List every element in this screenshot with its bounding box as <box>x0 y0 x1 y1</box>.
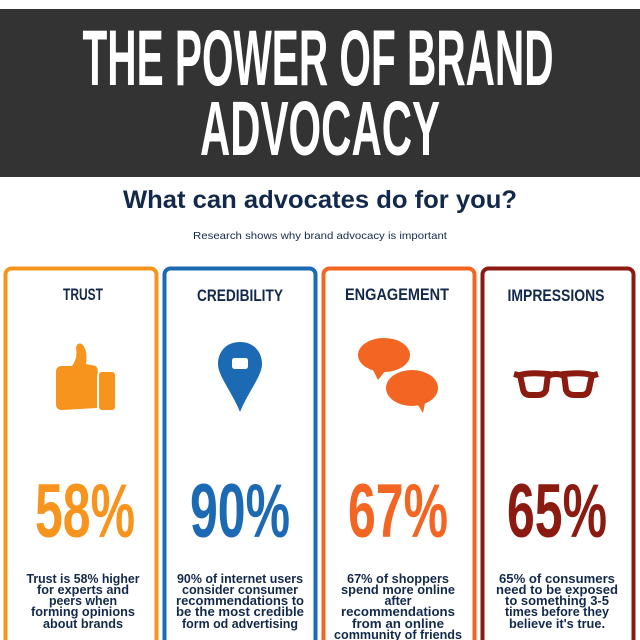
header banner <box>0 9 640 177</box>
panel: trust: Trust is 58% higher <box>26 572 140 586</box>
title: ADVOCACY <box>200 86 440 172</box>
intro text: Research shows why brand advocacy is important <box>193 230 447 242</box>
panel: trust: forming opinions <box>31 605 135 619</box>
panel: engagement: after <box>384 594 412 608</box>
icon: glasses <box>514 373 598 395</box>
icon: map pin <box>218 342 262 412</box>
panel: trust <box>6 268 156 640</box>
panel: engagement: from an online <box>352 617 444 631</box>
title <box>82 13 554 172</box>
panel: impressions: IMPRESSIONS <box>508 286 604 305</box>
panel: trust: for experts and <box>37 583 129 597</box>
panel: credibility: 90% of internet users <box>177 572 303 586</box>
panel: impressions <box>482 268 634 640</box>
panel: credibility: consider consumer <box>182 583 298 597</box>
panel: trust: peers when <box>49 594 117 608</box>
panel: engagement: spend more online <box>341 583 455 597</box>
panel: engagement: 67% <box>348 469 448 554</box>
panel: trust: 58% <box>35 469 135 554</box>
subtitle: What can advocates do for you? <box>123 186 517 214</box>
panel: impressions: times before they <box>505 605 609 619</box>
panel: impressions: believe it's true. <box>509 617 605 631</box>
panel: engagement: 67% of shoppers <box>347 572 449 586</box>
panel: trust: TRUST <box>63 285 103 304</box>
panel: credibility: form od advertising <box>182 617 298 631</box>
panel: credibility: CREDIBILITY <box>197 286 284 305</box>
panel: credibility: be the most credible <box>176 605 304 619</box>
panel: impressions: need to be exposed <box>496 583 618 597</box>
panel: engagement <box>324 268 474 640</box>
icon: speech bubbles <box>358 338 438 413</box>
panel: credibility: 90% <box>190 469 290 554</box>
panel: engagement: recommendations <box>341 605 455 619</box>
panel: engagement: ENGAGEMENT <box>345 285 450 304</box>
panel: credibility <box>164 268 316 640</box>
panel: impressions: to something 3-5 <box>505 594 609 608</box>
panel: trust: about brands <box>43 617 123 631</box>
panel: impressions: 65% of consumers <box>499 572 615 586</box>
panel: credibility: recommendations to <box>176 594 304 608</box>
icon: thumbs up <box>56 344 115 410</box>
